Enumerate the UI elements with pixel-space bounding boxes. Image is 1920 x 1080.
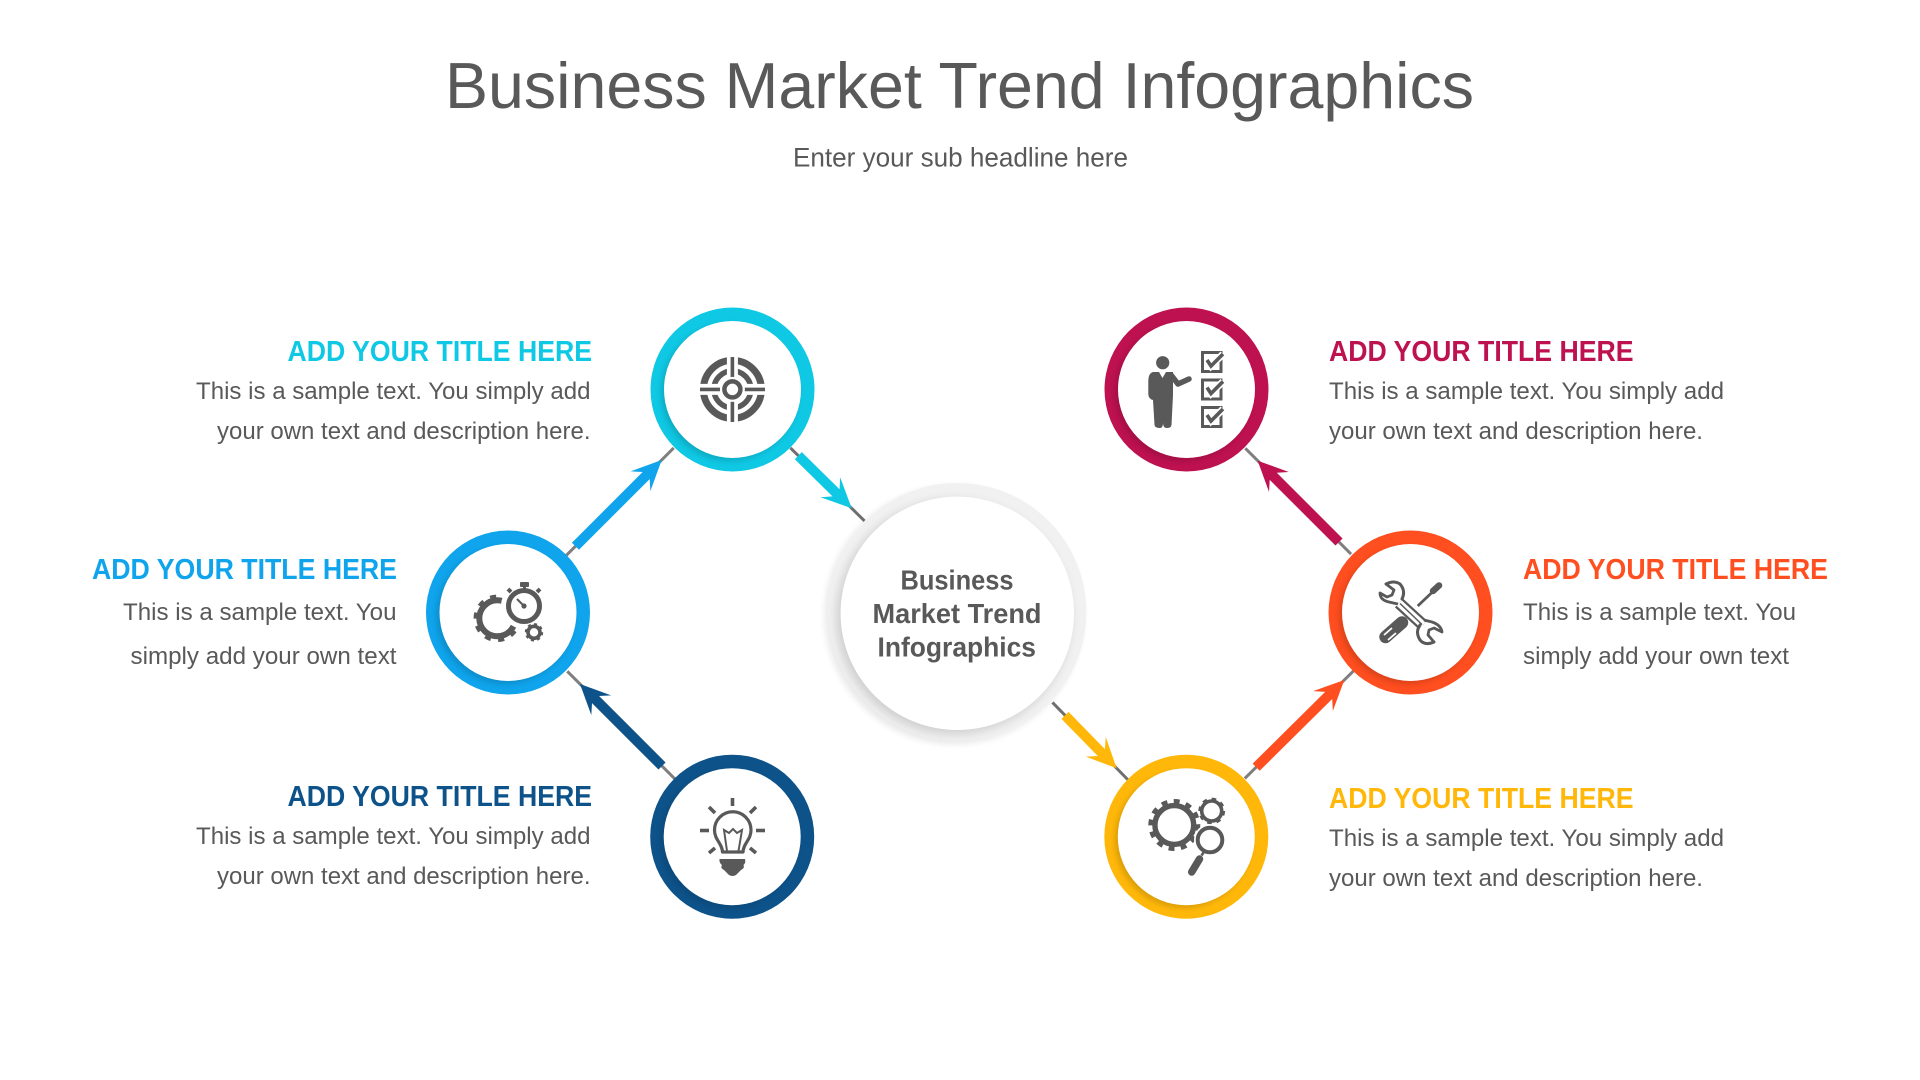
arrow: cyan to center <box>781 438 874 531</box>
text block: yellow: your own text and description here. <box>1329 865 1703 892</box>
text block: cyan: This is a sample text. You simply add <box>196 378 590 405</box>
text block: yellow: ADD YOUR TITLE HERE <box>1329 783 1634 815</box>
center circle <box>824 483 1086 745</box>
text block: crimson: your own text and description here. <box>1329 418 1703 445</box>
text block: orange: This is a sample text. You <box>1523 599 1796 626</box>
title: Business Market Trend Infographics <box>445 49 1474 122</box>
center circle: Infographics <box>878 632 1036 662</box>
text block: navy: your own text and description here. <box>217 863 590 890</box>
icon: gears and stopwatch <box>476 582 547 640</box>
text block: yellow: This is a sample text. You simply add <box>1329 825 1724 852</box>
text block: yellow <box>1329 783 1724 892</box>
arrow: navy to blue <box>557 661 685 789</box>
subtitle: Enter your sub headline here <box>793 142 1128 172</box>
text block: blue: simply add your own text <box>130 643 397 670</box>
text block: crimson: ADD YOUR TITLE HERE <box>1329 336 1634 368</box>
ring: yellow gears <box>1104 755 1268 919</box>
arrow: orange to crimson <box>1235 438 1361 564</box>
text block: cyan <box>196 336 592 445</box>
text block: navy <box>196 781 592 890</box>
icon: presenter and checklist <box>1148 352 1223 428</box>
arrow: blue to cyan <box>556 438 684 565</box>
text block: cyan: ADD YOUR TITLE HERE <box>288 336 592 368</box>
icon: target <box>698 355 767 424</box>
text block: orange: simply add your own text <box>1523 643 1789 670</box>
arrow: center to yellow <box>1042 693 1138 790</box>
icon: lightbulb <box>700 798 765 876</box>
text block: orange <box>1523 554 1828 670</box>
icon: wrench and screwdriver <box>1380 582 1442 644</box>
text block: blue: This is a sample text. You <box>123 599 396 626</box>
text block: blue: ADD YOUR TITLE HERE <box>92 554 397 586</box>
ring: cyan target <box>650 308 814 472</box>
ring: blue stopwatch <box>426 530 590 694</box>
ring: orange tools <box>1328 530 1492 694</box>
text block: cyan: your own text and description here. <box>217 418 590 445</box>
ring: crimson checklist <box>1104 308 1268 472</box>
arrow: yellow to orange <box>1235 660 1364 788</box>
text block: crimson <box>1329 336 1724 445</box>
icon: gears and magnifier <box>1151 799 1226 872</box>
text block: blue <box>92 554 397 670</box>
text block: navy: This is a sample text. You simply add <box>196 823 590 850</box>
ring: navy lightbulb <box>650 755 814 919</box>
center circle: Business <box>900 564 1014 596</box>
text block: navy: ADD YOUR TITLE HERE <box>288 781 592 813</box>
text block: crimson: This is a sample text. You simply add <box>1329 378 1724 405</box>
text block: orange: ADD YOUR TITLE HERE <box>1523 554 1828 586</box>
center circle: Market Trend <box>872 598 1042 629</box>
